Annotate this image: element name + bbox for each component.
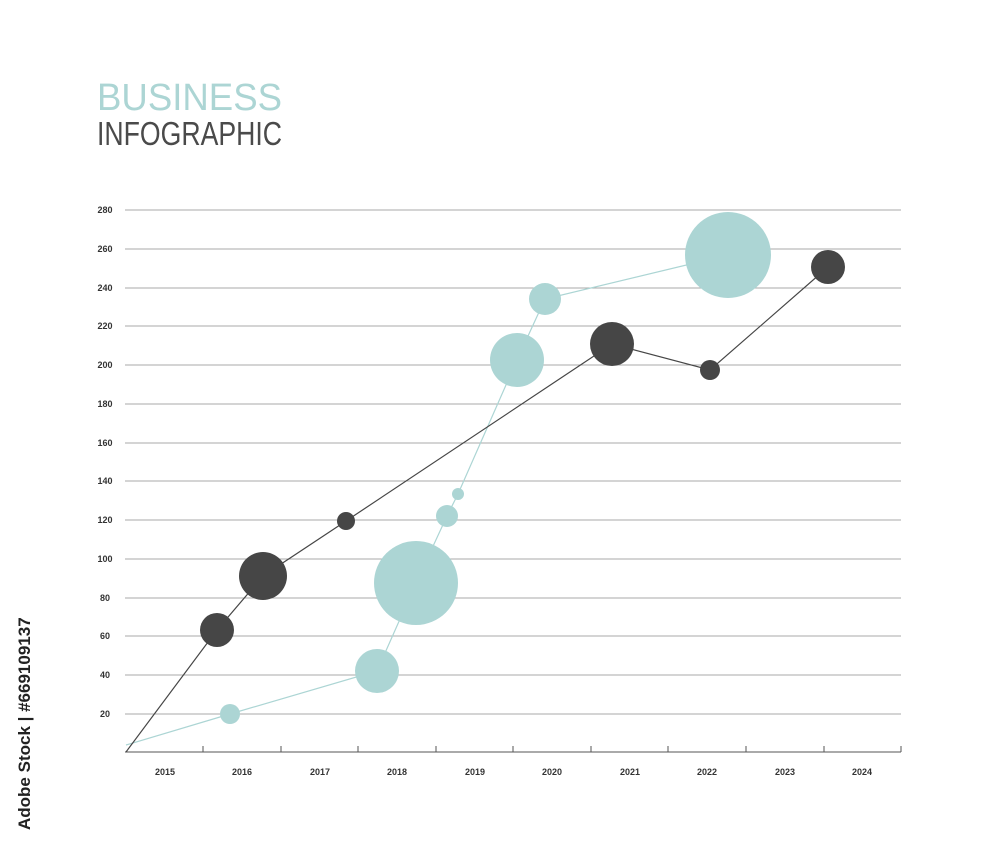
title: INFOGRAPHIC [97, 115, 282, 152]
y axis labels: 260 [97, 244, 113, 254]
y axis labels: 200 [97, 360, 113, 370]
y axis labels: 40 [100, 670, 110, 680]
x axis labels: 2021 [620, 767, 640, 777]
x axis labels [155, 767, 872, 777]
y axis labels: 180 [97, 399, 113, 409]
y axis labels: 280 [97, 205, 113, 215]
x axis labels: 2020 [542, 767, 562, 777]
y axis labels: 60 [100, 631, 110, 641]
watermark vertical text: Adobe Stock | #669109137 [15, 617, 34, 830]
x axis labels: 2024 [852, 767, 872, 777]
y axis labels: 120 [97, 515, 113, 525]
x axis labels: 2016 [232, 767, 252, 777]
x axis labels: 2022 [697, 767, 717, 777]
title [97, 77, 282, 152]
x axis labels: 2017 [310, 767, 330, 777]
y axis labels: 80 [100, 593, 110, 603]
y axis labels: 20 [100, 709, 110, 719]
x axis labels: 2023 [775, 767, 795, 777]
y axis labels: 140 [97, 476, 113, 486]
grid lines [125, 210, 901, 714]
y axis labels [97, 205, 113, 719]
series: dark [126, 250, 845, 752]
y axis labels: 160 [97, 438, 113, 448]
x axis [125, 746, 901, 752]
x axis labels: 2015 [155, 767, 175, 777]
y axis labels: 220 [97, 321, 113, 331]
x axis labels: 2019 [465, 767, 485, 777]
series: teal [126, 212, 771, 745]
title: BUSINESS [97, 77, 282, 119]
y axis labels: 100 [97, 554, 113, 564]
x axis labels: 2018 [387, 767, 407, 777]
y axis labels: 240 [97, 283, 113, 293]
